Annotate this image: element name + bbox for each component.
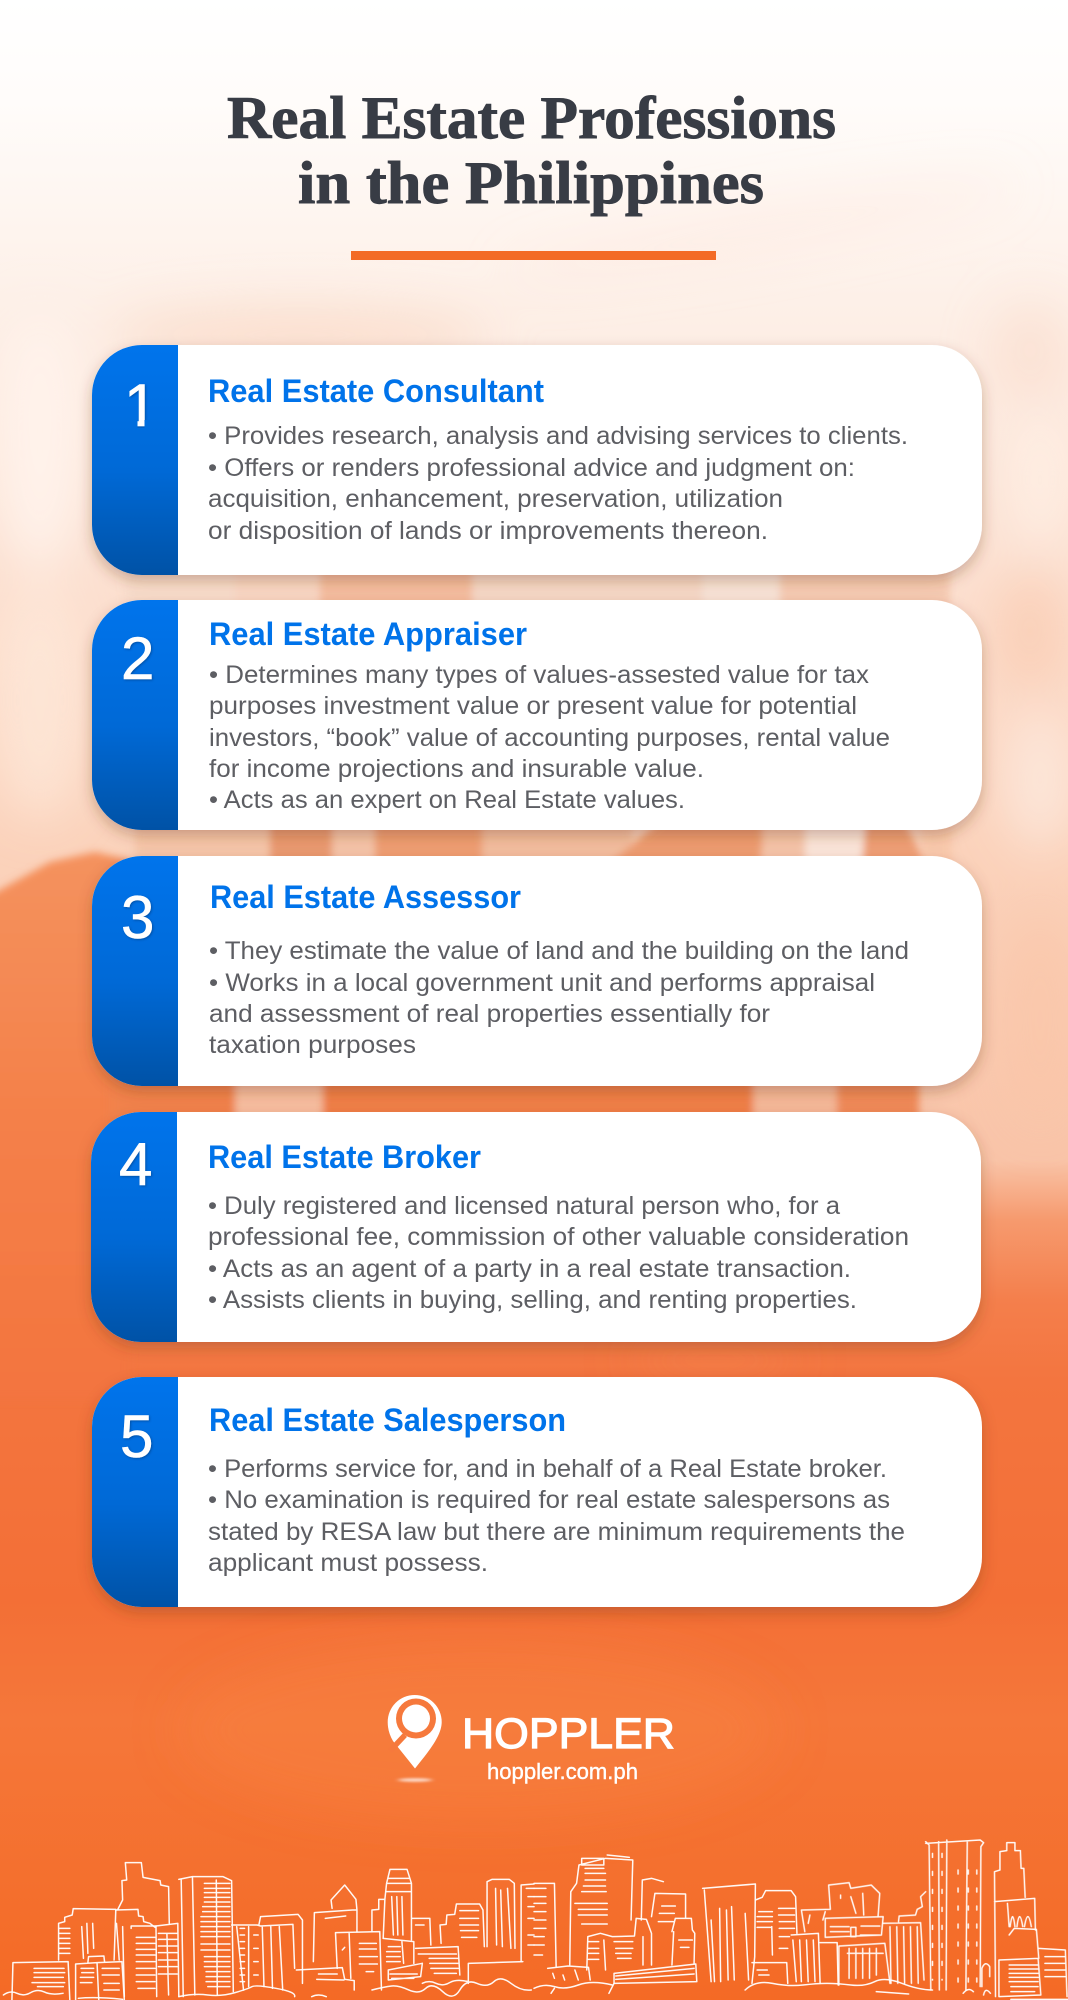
logo: hoppler [388,1695,675,1784]
card body: • Duly registered and licensed natural person who, for a [208,1192,840,1220]
number badge 1 [92,345,178,575]
card body [209,661,890,814]
title underline [351,251,716,260]
card body: or disposition of lands or improvements thereon. [208,517,768,545]
number badge 3 [92,856,178,1086]
card heading: Real Estate Appraiser [209,616,527,652]
card body: applicant must possess. [208,1549,488,1577]
background bands between cards [110,565,952,1122]
card body [209,937,909,1059]
number badge 5 [92,1377,178,1607]
number badge 1: 1 [124,372,157,439]
panel: real estate appraiser [92,600,982,830]
card heading: Real Estate Consultant [208,373,544,409]
card body: • Works in a local government unit and performs appraisal [209,969,875,997]
background figure: shirt shape [0,852,130,1400]
card body: • They estimate the value of land and the building on the land [209,937,909,965]
card heading: Real Estate Broker [208,1139,481,1175]
panel: real estate consultant [92,345,982,575]
card body: • Determines many types of values-assested value for tax [209,661,870,689]
card body [208,1455,905,1577]
title [227,85,836,216]
card body: and assessment of real properties essentially for [209,1000,770,1028]
number badge 3: 3 [121,884,154,951]
card body: • Acts as an agent of a party in a real estate transaction. [208,1255,851,1283]
card body: taxation purposes [209,1031,416,1059]
card body: • Provides research, analysis and advising services to clients. [208,422,908,450]
number badge 4 [91,1112,177,1342]
number badge 5: 5 [120,1403,153,1470]
number badge 2 [92,600,178,830]
card body: • No examination is required for real estate salespersons as [208,1486,890,1514]
panel: real estate assessor [92,856,982,1086]
city skyline illustration [3,1840,1068,2000]
card body: professional fee, commission of other valuable consideration [208,1223,909,1251]
card body: investors, “book” value of accounting purposes, rental value [209,724,890,752]
card body [208,422,908,545]
card heading: Real Estate Salesperson [209,1402,566,1438]
card body: acquisition, enhancement, preservation, utilization [208,485,783,513]
title: Real Estate Professions [227,85,836,151]
icon: map pin [388,1695,442,1782]
brand name: HOPPLER [462,1710,675,1758]
panel: real estate salesperson [92,1377,982,1607]
card body: purposes investment value or present value for potential [209,692,857,720]
card body: • Acts as an expert on Real Estate values. [209,786,685,814]
card heading: Real Estate Assessor [210,879,521,915]
number badge 4: 4 [119,1131,152,1198]
website: hoppler.com.ph [487,1759,638,1784]
card body: • Offers or renders professional advice and judgment on: [208,454,855,482]
card body: for income projections and insurable value. [209,755,704,783]
number badge 2: 2 [121,625,154,692]
card body: • Assists clients in buying, selling, and renting properties. [208,1286,857,1314]
card body: • Performs service for, and in behalf of a Real Estate broker. [208,1455,887,1483]
card body [208,1192,909,1314]
panel: real estate broker [91,1112,981,1342]
card body: stated by RESA law but there are minimum requirements the [208,1518,905,1546]
title: in the Philippines [298,150,764,216]
